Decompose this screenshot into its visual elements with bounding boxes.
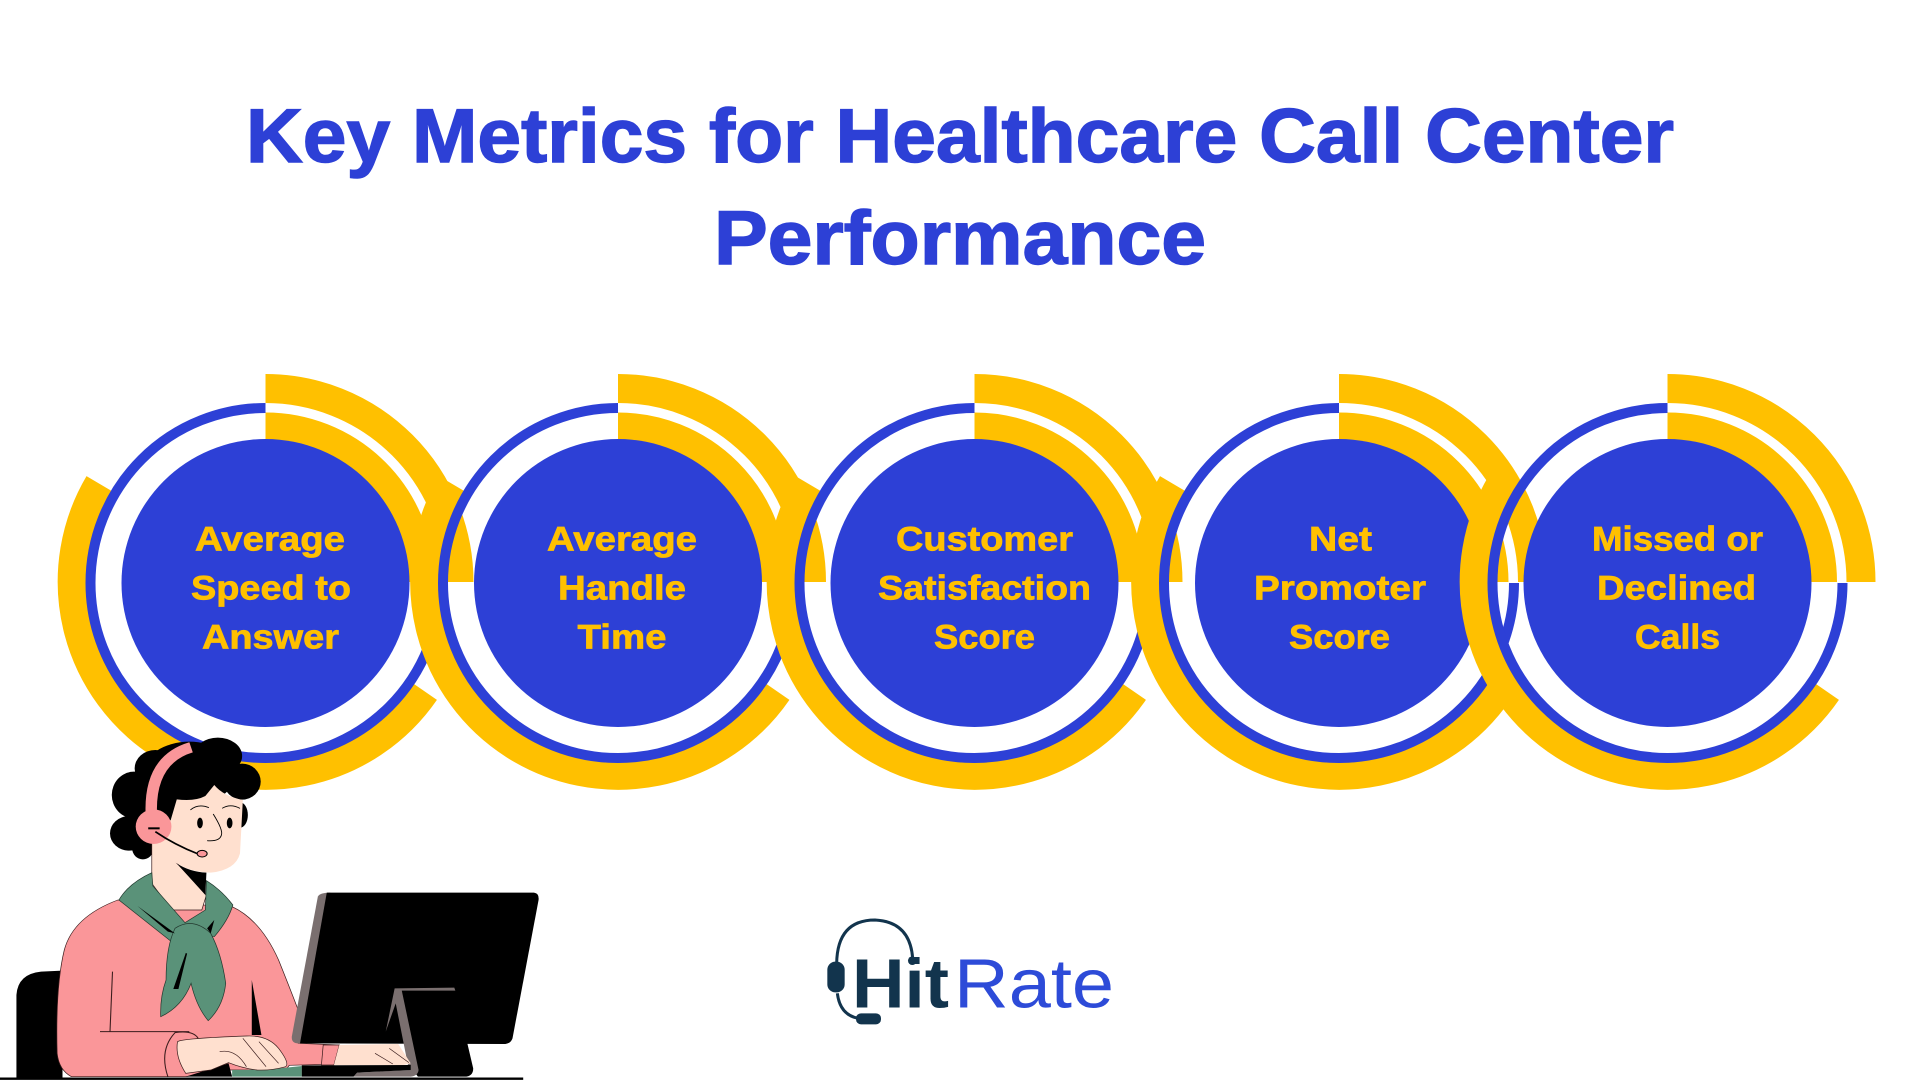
metric circle: Average Speed to Answer: Speed to — [191, 569, 351, 607]
scarf — [119, 873, 233, 1021]
hands — [177, 1036, 411, 1073]
desk line — [0, 1075, 523, 1080]
metric circle: Missed or Declined Calls — [1474, 388, 1861, 775]
metric circle: Customer Satisfaction Score: Customer — [896, 521, 1073, 559]
facial features — [190, 806, 240, 841]
desk pad and keyboard — [186, 1063, 411, 1077]
metric circle: Net Promoter Score: Promoter — [1254, 569, 1426, 607]
title — [246, 94, 1674, 281]
metric circle: Customer Satisfaction Score — [781, 388, 1168, 775]
title: Performance — [714, 196, 1206, 281]
shirt details — [100, 972, 261, 1077]
logo wordmark: Hit — [852, 944, 949, 1022]
neck — [152, 840, 206, 910]
chin shadow — [177, 863, 206, 895]
metric circle: Missed or Declined Calls: Missed or — [1592, 521, 1763, 559]
logo headset icon — [827, 920, 917, 1024]
metric circle: Net Promoter Score: Net — [1309, 521, 1372, 559]
illustration: call center agent at computer — [0, 738, 539, 1079]
title: Key Metrics for Healthcare Call Center — [246, 94, 1674, 179]
metric circle: Average Speed to Answer: Average — [195, 521, 345, 559]
monitor — [292, 893, 539, 1077]
metric circle: Net Promoter Score — [1146, 388, 1532, 775]
logo wordmark: Rate — [954, 944, 1114, 1022]
hair — [110, 738, 261, 859]
metric circle: Average Handle Time: Time — [578, 618, 666, 656]
logo: HitRate — [827, 920, 1114, 1024]
logo wordmark — [852, 944, 1114, 1022]
agent body — [57, 900, 339, 1077]
metric circle: Net Promoter Score: Score — [1289, 618, 1390, 656]
face — [154, 785, 243, 873]
metric circle: Average Speed to Answer — [72, 388, 459, 775]
metric circle: Average Speed to Answer: Answer — [202, 618, 339, 656]
metric circle: Customer Satisfaction Score: Score — [934, 618, 1035, 656]
headset — [136, 747, 207, 857]
metric circle: Average Handle Time: Average — [547, 521, 697, 559]
metric circle: Customer Satisfaction Score: Satisfaction — [878, 569, 1091, 607]
metric circle: Missed or Declined Calls: Calls — [1635, 618, 1720, 656]
metric circle: Average Handle Time: Handle — [558, 569, 686, 607]
metric circle: Average Handle Time — [425, 388, 812, 775]
chair — [16, 971, 62, 1078]
metric circle: Missed or Declined Calls: Declined — [1597, 569, 1756, 607]
